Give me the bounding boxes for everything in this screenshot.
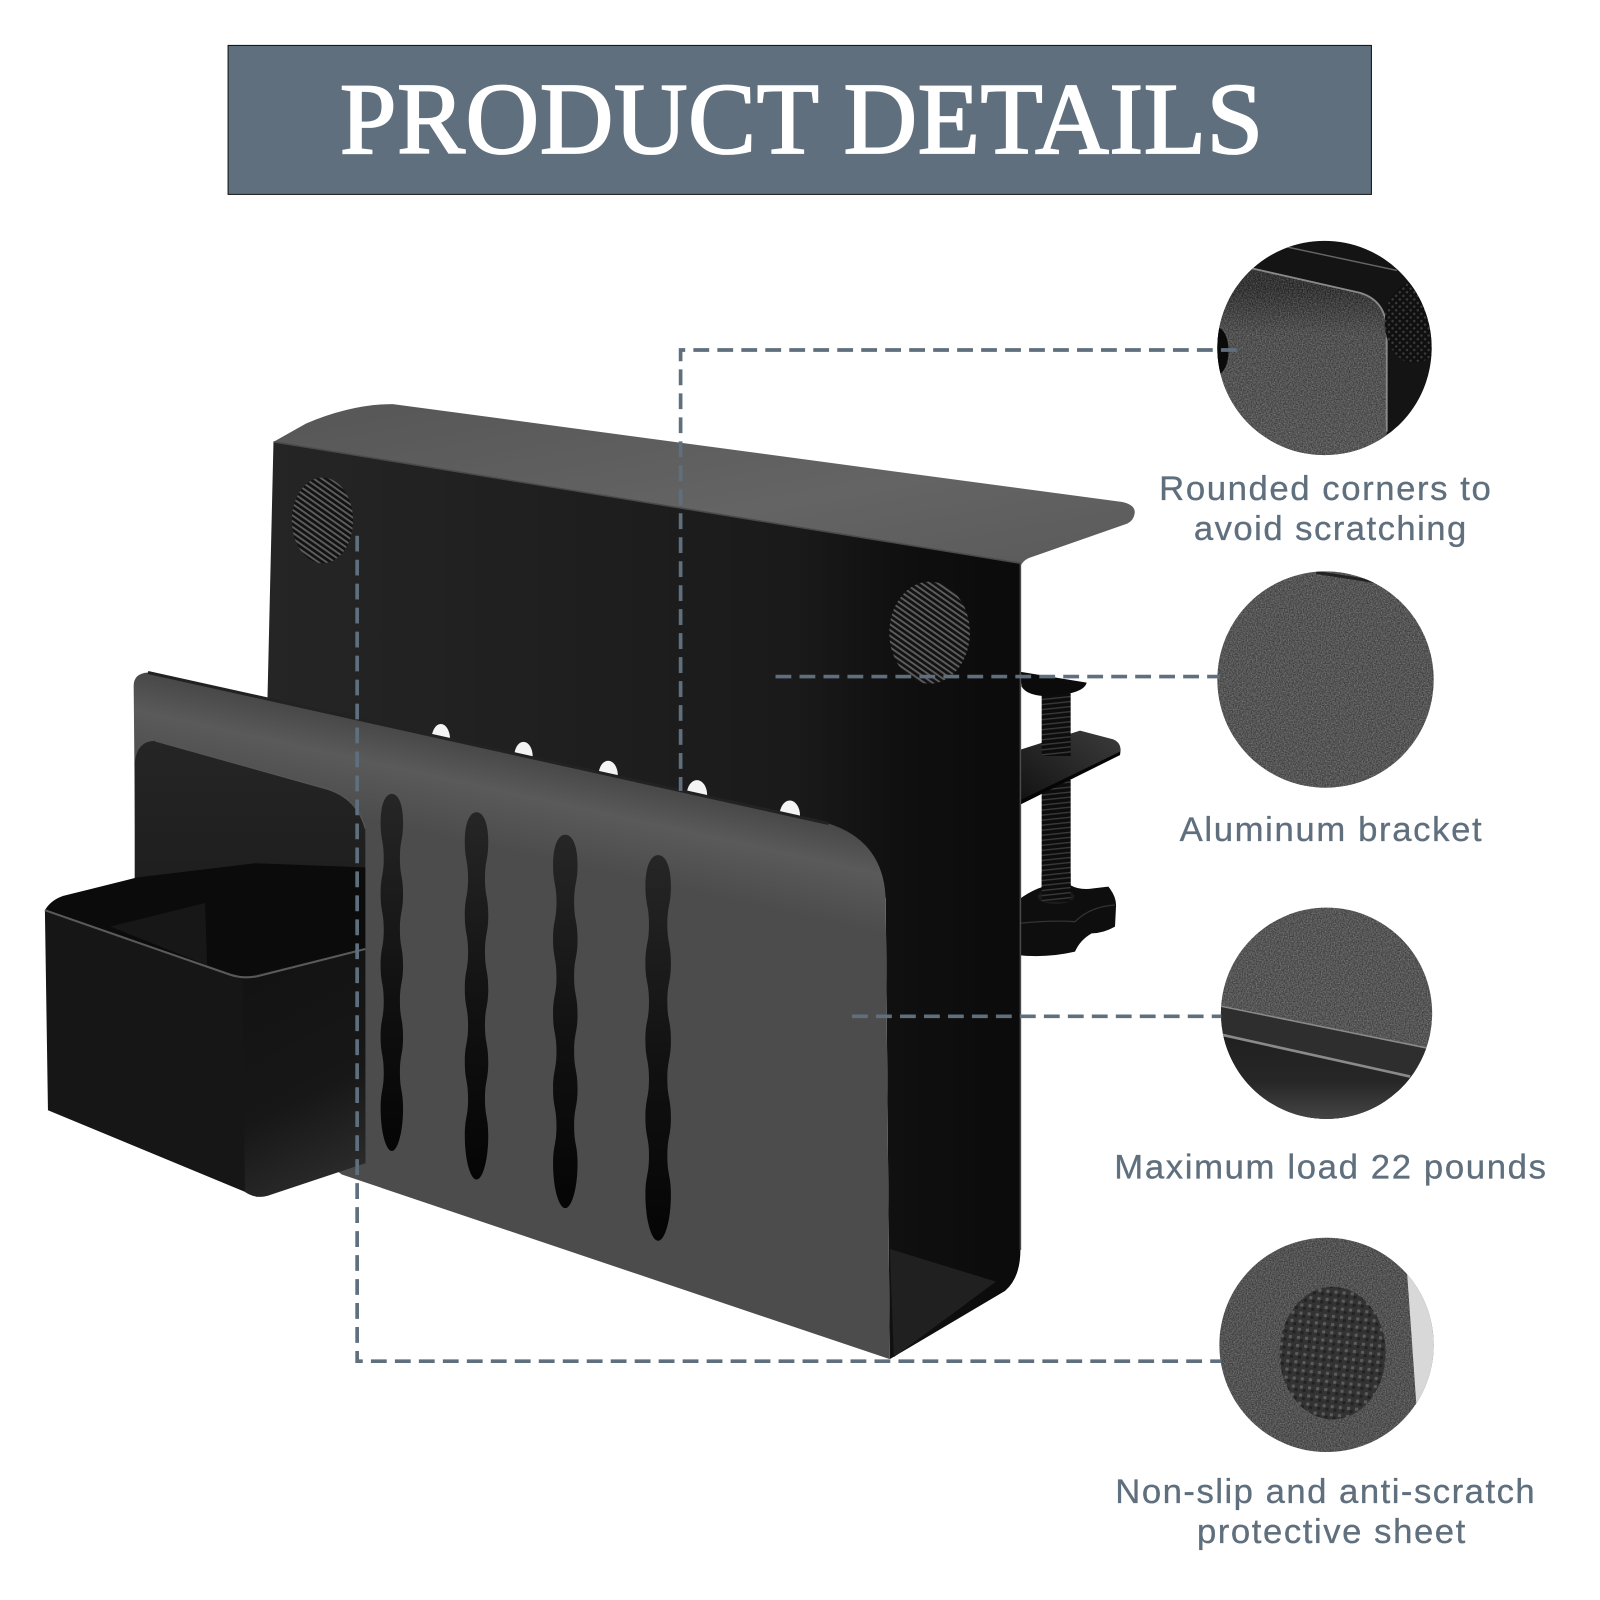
rubber pad left bbox=[292, 478, 353, 563]
detail circle: load edge bbox=[1220, 908, 1432, 1119]
detail circle: rounded corner bbox=[1217, 240, 1432, 456]
top shelf bbox=[273, 404, 1135, 566]
label: protective sheet: Non-slip and anti-scratch bbox=[1115, 1473, 1535, 1511]
product: desk organizer bbox=[45, 404, 1135, 1359]
label: protective sheet: protective sheet bbox=[1197, 1513, 1466, 1551]
label: rounded corners: Rounded corners to bbox=[1159, 470, 1491, 508]
front panel bbox=[134, 672, 890, 1359]
back panel bbox=[267, 442, 1020, 1359]
label: protective sheet bbox=[1115, 1473, 1535, 1551]
title banner: PRODUCT DETAILS bbox=[340, 63, 1263, 176]
callout line: aluminum bracket bbox=[776, 675, 1219, 678]
pencil holder bbox=[45, 863, 365, 1197]
wavy slots bbox=[381, 794, 671, 1241]
holder back plate bbox=[135, 741, 365, 1163]
clamp hardware bbox=[1017, 672, 1121, 956]
label: rounded corners bbox=[1159, 470, 1491, 548]
detail circle: aluminum surface bbox=[1214, 566, 1439, 791]
rubber pad right bbox=[889, 582, 970, 684]
callout line: maximum load bbox=[852, 1015, 1221, 1018]
detail circle: protective sheet bbox=[1214, 1235, 1439, 1459]
label: maximum load: Maximum load 22 pounds bbox=[1114, 1149, 1546, 1187]
label: aluminum bracket: Aluminum bracket bbox=[1180, 811, 1482, 849]
title banner bbox=[228, 45, 1371, 194]
interior floor bbox=[890, 1249, 996, 1357]
bolt holes bbox=[432, 724, 800, 830]
callout line: protective sheet bbox=[357, 536, 1221, 1361]
label: rounded corners: avoid scratching bbox=[1194, 510, 1466, 548]
callout line: rounded corners bbox=[681, 350, 1237, 791]
